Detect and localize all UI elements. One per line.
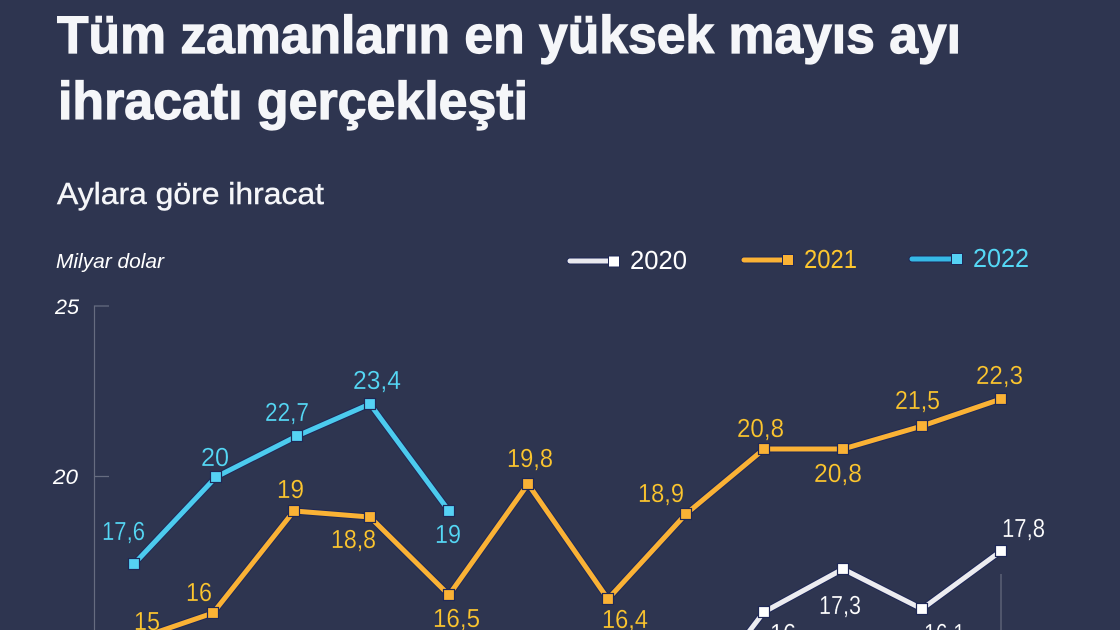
line series 2020: 17,8 [1002,513,1045,543]
title: Tüm zamanların en yüksek mayıs ayı [57,6,961,65]
line series 2021: 16 [186,577,212,607]
line series 2022: 17,6 [102,516,145,546]
y axis: 25 [54,296,79,319]
line series 2021: 20,8 [737,413,784,443]
legend: 2021: 2021 [804,244,857,274]
y axis [52,296,1001,630]
legend: 2022: 2022 [973,243,1029,273]
legend: 2020: 2020 [630,245,687,275]
line series 2020: 17,3 [819,590,861,620]
line series 2022 [102,365,461,570]
unit label: Milyar dolar [56,251,165,273]
legend: 2021 [744,244,857,274]
line series 2022: 22,7 [265,397,309,427]
line series 2020 [735,513,1045,630]
subtitle: Aylara göre ihracat [57,176,324,211]
line series 2021: 19 [277,474,304,504]
line series 2022: 20 [201,442,229,472]
line series 2021: 21,5 [895,385,940,415]
title: ihracatı gerçekleşti [58,72,528,131]
line series 2021: 19,8 [507,443,553,473]
line series 2021: 20,8 [814,458,862,488]
title [57,6,961,131]
legend: 2022 [912,243,1029,273]
line series 2021 [134,360,1023,630]
line series 2022: 23,4 [353,365,401,395]
legend: 2020 [570,245,687,275]
y axis: 20 [52,466,78,489]
line series 2022: 19 [435,519,461,549]
legend [570,243,1029,275]
line series 2021: 22,3 [976,360,1023,390]
line series 2021: 18,8 [331,524,376,554]
line series 2021: 18,9 [638,478,684,508]
